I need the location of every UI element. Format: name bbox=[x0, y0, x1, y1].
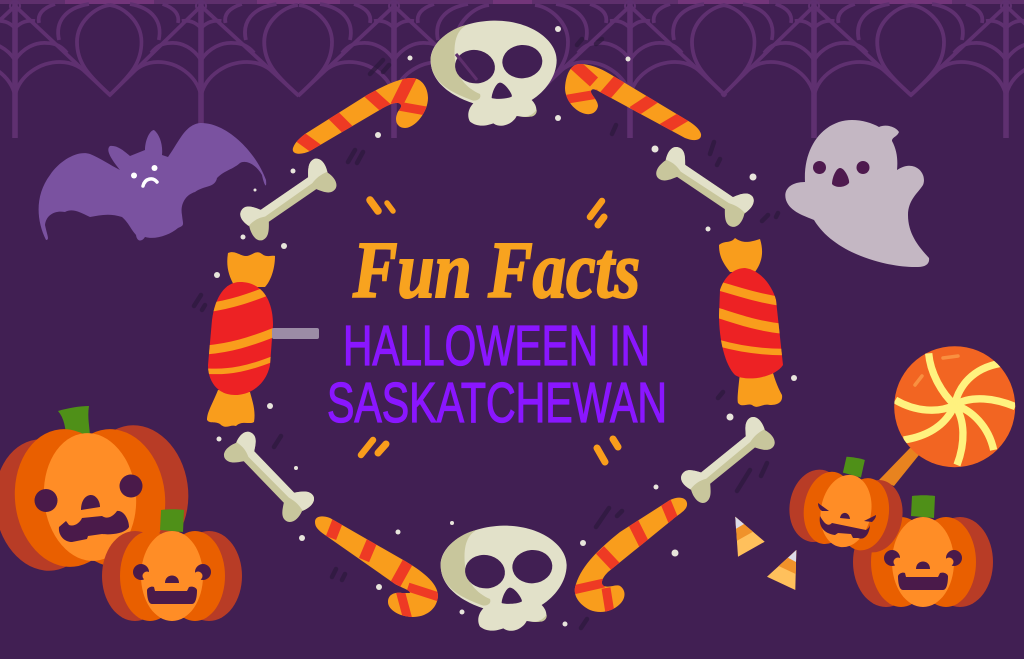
icon: small pumpkin left bbox=[102, 509, 242, 621]
grey bar bbox=[272, 328, 319, 339]
icon: candy cane top right bbox=[562, 62, 701, 140]
icon: angry pumpkin right bbox=[784, 448, 911, 557]
icon: bone bottom left bbox=[221, 428, 317, 526]
icon: lollipop bbox=[879, 346, 1015, 486]
confetti dots bbox=[214, 26, 797, 626]
icon: wrapped candy left bbox=[205, 252, 275, 427]
icon: small pumpkin bottom right bbox=[853, 495, 993, 607]
icon: candy cane bottom left bbox=[315, 515, 442, 620]
icon: bone top left bbox=[237, 156, 340, 243]
orange accent dashes bbox=[361, 200, 618, 462]
icon: candy cane top left bbox=[293, 74, 432, 154]
title: Fun Facts: Fun Facts bbox=[352, 227, 640, 315]
icon: bone top right bbox=[653, 144, 757, 230]
icon: large pumpkin left bbox=[0, 406, 197, 577]
icon: bone bottom right bbox=[677, 414, 779, 506]
scribble marks bbox=[194, 39, 778, 628]
icon: candy cane bottom right bbox=[573, 498, 687, 613]
icon: candy corn left bbox=[735, 517, 765, 557]
icon: ghost bbox=[785, 120, 929, 267]
icon: bottom skull bbox=[441, 526, 567, 631]
icon: wrapped candy right bbox=[715, 238, 785, 407]
icon: top skull bbox=[431, 21, 557, 126]
icon: bat bbox=[39, 123, 266, 241]
icon: candy corn right bbox=[767, 550, 796, 590]
subtitle line 2: SASKATCHEWAN bbox=[327, 371, 667, 435]
subtitle line 1: HALLOWEEN IN bbox=[343, 314, 650, 378]
spider web border bbox=[0, 0, 1024, 138]
